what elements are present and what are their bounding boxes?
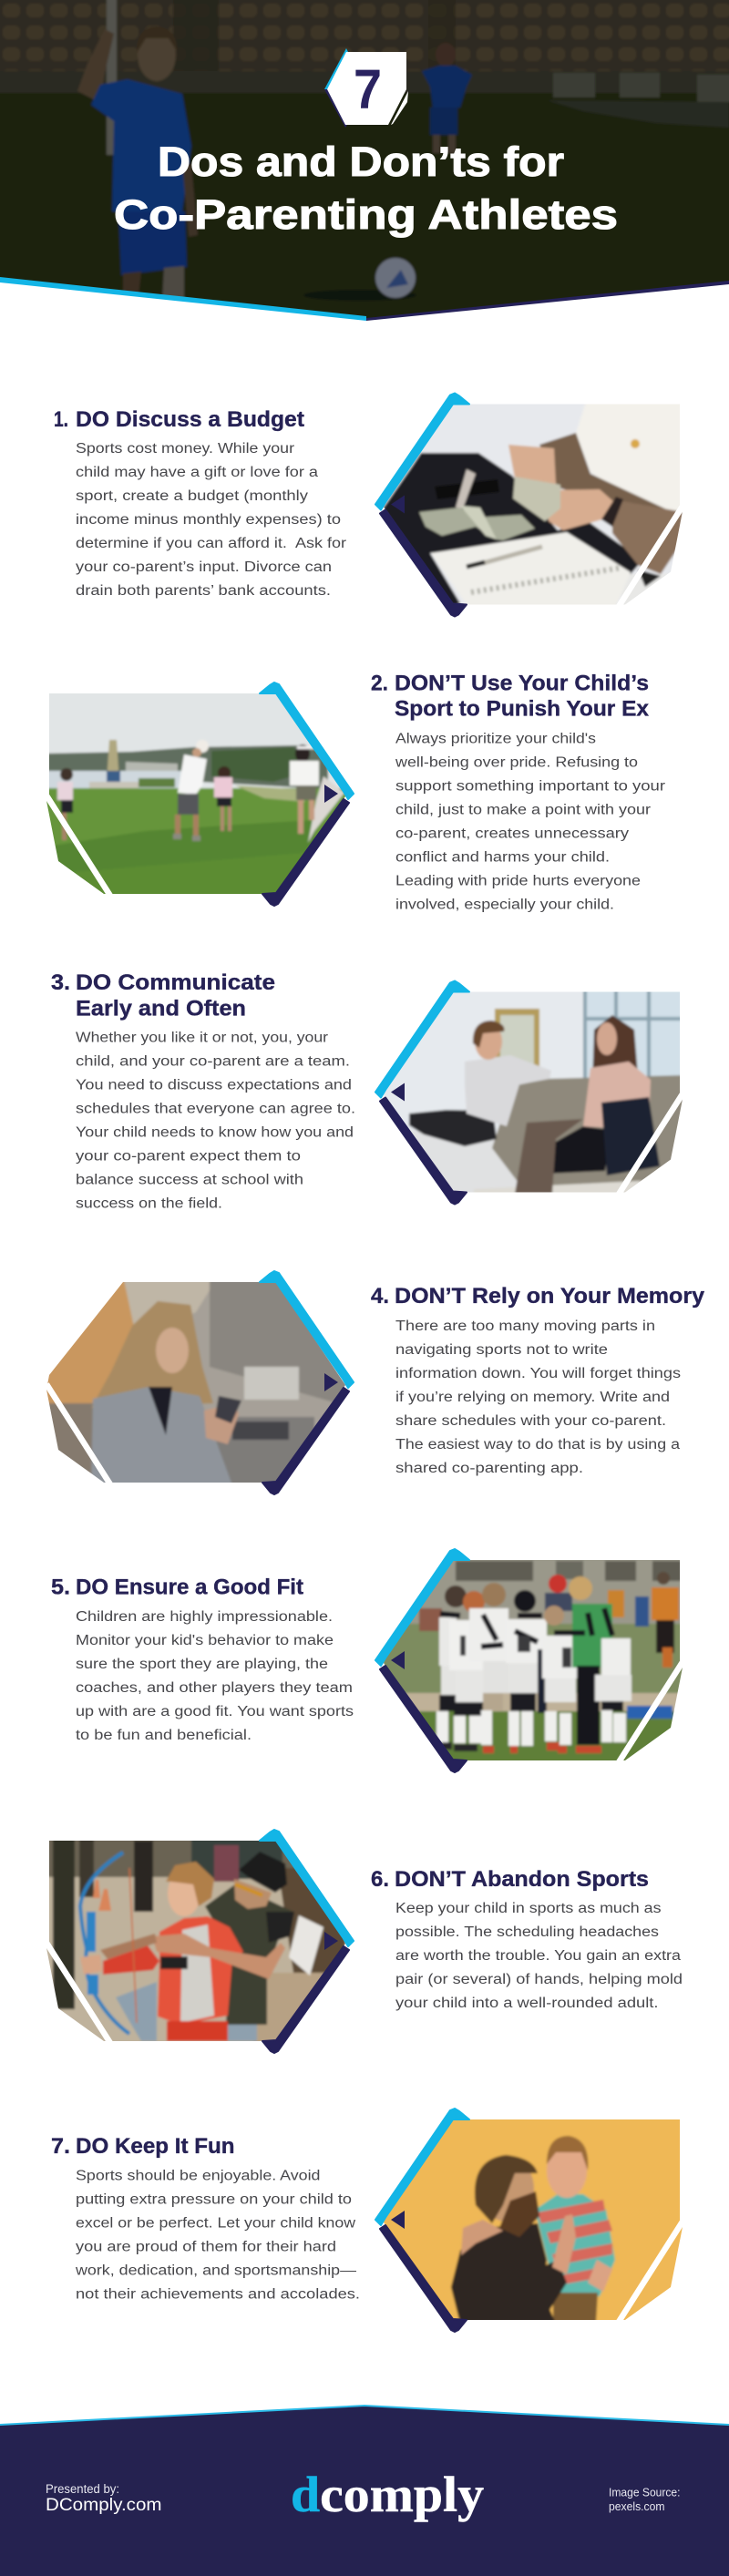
heading 3: 3.	[51, 970, 70, 995]
golfer small child	[57, 768, 73, 840]
navy frame edge	[380, 1097, 467, 1205]
heading 3	[51, 970, 275, 1021]
badge: number 7: 7	[354, 58, 382, 120]
panel: item 1 discuss a budget	[54, 394, 690, 616]
heading 7: DO Keep It Fun	[76, 2134, 235, 2159]
body text 1: determine if you can afford it. Ask for	[76, 536, 346, 551]
body text 6	[395, 1901, 683, 2011]
player 4	[506, 1590, 547, 1746]
player 2	[449, 1591, 486, 1743]
green goalkeeper	[569, 1576, 612, 1745]
heading 5: DO Ensure a Good Fit	[76, 1575, 303, 1600]
body text 3: success on the field.	[76, 1196, 222, 1212]
hero player one	[77, 26, 198, 301]
body text 4: information down. You will forget things	[395, 1366, 681, 1381]
footer cyan edge	[0, 2406, 729, 2425]
frame arrow	[391, 496, 405, 514]
body text 2: co-parent, creates unnecessary	[395, 826, 629, 842]
image frame 6	[46, 1830, 354, 2053]
body text 2: conflict and harms your child.	[395, 849, 610, 866]
heading 2: DON’T Use Your Child’s	[395, 671, 649, 696]
heading 2	[371, 671, 650, 722]
heading 4: DON’T Rely on Your Memory	[395, 1284, 705, 1309]
panel: item 7 keep it fun	[51, 2109, 688, 2332]
body text 7: excel or be perfect. Let your child know	[76, 2216, 356, 2231]
image frame 7	[375, 2109, 683, 2332]
cyan frame edge	[375, 1549, 469, 1666]
heading 7: 7.	[51, 2134, 70, 2159]
cyan frame edge	[375, 2109, 469, 2225]
body text 1: drain both parents’ bank accounts.	[76, 583, 331, 599]
golfer mother	[290, 744, 319, 834]
orange player in background	[652, 1572, 679, 1668]
heading 6: DON’T Abandon Sports	[395, 1867, 649, 1892]
body text 3: Your child needs to know how you and	[76, 1124, 354, 1141]
frame arrow	[324, 1373, 338, 1391]
image frame 2	[46, 682, 354, 906]
woman on sofa	[515, 1015, 660, 1194]
player 3	[469, 1583, 508, 1745]
title: Dos and Don’ts for	[158, 139, 564, 185]
white accent stripe	[619, 1093, 683, 1194]
heading 2: 2.	[371, 671, 388, 696]
player 6	[595, 1638, 631, 1742]
hero edge: cyan	[0, 277, 366, 321]
man on sofa	[409, 1021, 551, 1146]
body text 7: not their achievements and accolades.	[76, 2287, 360, 2302]
hero player two	[422, 43, 472, 153]
archery bow	[80, 1852, 129, 2034]
frame arrow	[391, 2211, 405, 2229]
son	[535, 2136, 615, 2324]
navy frame edge	[262, 1946, 349, 2053]
heading 4: 4.	[371, 1284, 389, 1309]
body text 1: your co-parent’s input. Divorce can	[76, 559, 332, 575]
archery boy	[103, 1862, 243, 2041]
navy frame edge	[380, 2225, 467, 2332]
coach arm	[152, 1934, 285, 1979]
navy frame edge	[380, 1666, 467, 1772]
player 1	[436, 1586, 467, 1744]
heading 3: Early and Often	[76, 997, 246, 1021]
title: Co-Parenting Athletes	[114, 191, 618, 238]
body text 3: You need to discuss expectations and	[76, 1077, 352, 1093]
frame arrow	[324, 785, 338, 803]
navy frame edge	[262, 1388, 349, 1494]
father	[451, 2155, 576, 2324]
white accent stripe	[619, 1662, 683, 1762]
body text 1: income minus monthly expenses) to	[76, 512, 341, 528]
body text 5	[76, 1609, 354, 1743]
woman with phone	[91, 1301, 241, 1485]
title	[114, 139, 618, 238]
body text 4: shared co-parenting app.	[395, 1461, 583, 1476]
body text 5: Children are highly impressionable.	[76, 1609, 333, 1625]
body text 4	[395, 1319, 681, 1476]
cyan frame edge	[260, 682, 354, 799]
heading 1: 1.	[54, 407, 68, 432]
body text 6: Keep your child in sports as much as	[395, 1901, 662, 1916]
hero header	[0, 0, 729, 328]
body text 3: Whether you like it or not, you, your	[76, 1030, 328, 1046]
body text 5: coaches, and other players they team	[76, 1680, 353, 1696]
heading 3: DO Communicate	[76, 970, 275, 995]
image source credit: Image Source:	[609, 2486, 680, 2499]
photo: youth soccer team huddle	[384, 1560, 683, 1760]
body text 2: Always prioritize your child's	[395, 731, 596, 747]
badge: number 7	[324, 48, 408, 128]
body text 3	[76, 1030, 355, 1212]
hero photo: young soccer players on a pitch	[0, 0, 729, 328]
cyan frame edge	[375, 980, 469, 1097]
body text 3: schedules that everyone can agree to.	[76, 1101, 355, 1117]
photo: man coaching a boy in archery	[46, 1841, 345, 2041]
frame arrow	[391, 1083, 405, 1101]
footer	[0, 2406, 729, 2576]
photo: parents talking on a sofa	[384, 991, 683, 1192]
frame arrow	[391, 1651, 405, 1669]
presented by credit: Presented by:	[46, 2482, 119, 2496]
body text 5: Monitor your kid's behavior to make	[76, 1633, 334, 1648]
panel: item 4 don't rely on your memory	[41, 1271, 705, 1494]
photo: hands counting money over a notebook	[384, 405, 683, 605]
team huddle	[436, 1575, 631, 1753]
presented by credit: DComply.com	[46, 2496, 162, 2515]
heading 5: 5.	[51, 1575, 70, 1600]
cyan frame edge	[375, 394, 469, 510]
body text 4: There are too many moving parts in	[395, 1319, 655, 1334]
body text 2	[395, 731, 665, 913]
white accent stripe	[46, 795, 110, 896]
white accent stripe	[619, 507, 683, 607]
panel: item 3 communicate early and often	[51, 970, 688, 1212]
body text 7: work, dedication, and sportsmanship—	[75, 2263, 357, 2278]
heading 6: 6.	[371, 1867, 389, 1892]
body text 6: possible. The scheduling headaches	[395, 1924, 659, 1940]
body text 7: putting extra pressure on your child to	[76, 2192, 352, 2207]
panel: item 5 ensure a good fit	[51, 1549, 688, 1772]
body text 2: involved, especially your child.	[395, 897, 614, 913]
image frame 4	[46, 1271, 354, 1494]
body text 7	[75, 2169, 360, 2302]
frame arrow	[324, 1932, 338, 1950]
navy frame edge	[262, 799, 349, 906]
heading 2: Sport to Punish Your Ex	[395, 696, 650, 722]
panel: item 2 don't use your child's sport to punish your ex	[41, 671, 665, 913]
body text 2: well-being over pride. Refusing to	[395, 754, 638, 771]
image frame 5	[375, 1549, 683, 1772]
white accent stripe	[46, 1943, 110, 2043]
body text 2: support something important to your	[395, 778, 665, 795]
hero edge: navy	[366, 281, 729, 321]
body text 4: if you’re relying on memory. Write and	[395, 1390, 670, 1405]
logo: dcomply: dcomply	[291, 2467, 484, 2522]
navy frame edge	[380, 510, 467, 616]
body text 4: The easiest way to do that is by using a	[395, 1437, 680, 1452]
photo: family playing golf on a lawn	[46, 693, 345, 894]
panel: item 6 don't abandon sports	[41, 1830, 683, 2053]
footer background	[0, 2406, 729, 2576]
body text 7: Sports should be enjoyable. Avoid	[76, 2169, 321, 2183]
body text 6: are worth the trouble. You gain an extra	[395, 1948, 682, 1964]
cyan frame edge	[260, 1271, 354, 1388]
heading 1: DO Discuss a Budget	[76, 407, 304, 432]
body text 4: share schedules with your co-parent.	[395, 1413, 666, 1429]
hero soccer ball	[303, 258, 416, 301]
body text 2: child, just to make a point with your	[395, 802, 651, 818]
cyan frame edge	[260, 1830, 354, 1946]
body text 1	[76, 441, 346, 599]
body text 5: up with are a good fit. You want sports	[76, 1704, 354, 1719]
body text 3: your co-parent expect them to	[76, 1148, 301, 1165]
photo: woman looking at her phone on a street	[46, 1282, 345, 1483]
body text 6: your child into a well-rounded adult.	[395, 1996, 658, 2011]
body text 1: Sports cost money. While your	[76, 441, 294, 457]
white accent stripe	[46, 1384, 110, 1484]
white accent stripe	[619, 2222, 683, 2322]
image frame 1	[375, 394, 683, 616]
body text 5: sure the sport they are playing, the	[76, 1657, 328, 1672]
player 5	[538, 1606, 581, 1745]
body text 1: child may have a gift or love for a	[76, 465, 319, 480]
image source credit: pexels.com	[609, 2499, 665, 2513]
image frame 3	[375, 980, 683, 1205]
body text 7: you are proud of them for their hard	[76, 2240, 336, 2254]
golfer girl	[214, 766, 232, 831]
body text 6: pair (or several) of hands, helping mold	[395, 1972, 683, 1987]
image source credit	[609, 2486, 680, 2513]
body text 3: balance success at school with	[76, 1172, 303, 1188]
golfer father	[173, 740, 209, 841]
archery coach	[116, 1852, 294, 2041]
body text 1: sport, create a budget (monthly	[76, 488, 308, 504]
body text 2: Leading with pride hurts everyone	[395, 873, 641, 889]
body text 3: child, and your co-parent are a team.	[76, 1053, 350, 1070]
body text 5: to be fun and beneficial.	[76, 1728, 252, 1743]
body text 4: navigating sports not to write	[395, 1342, 608, 1358]
photo: father and son high five on yellow	[384, 2119, 683, 2320]
presented by credit	[46, 2482, 162, 2515]
